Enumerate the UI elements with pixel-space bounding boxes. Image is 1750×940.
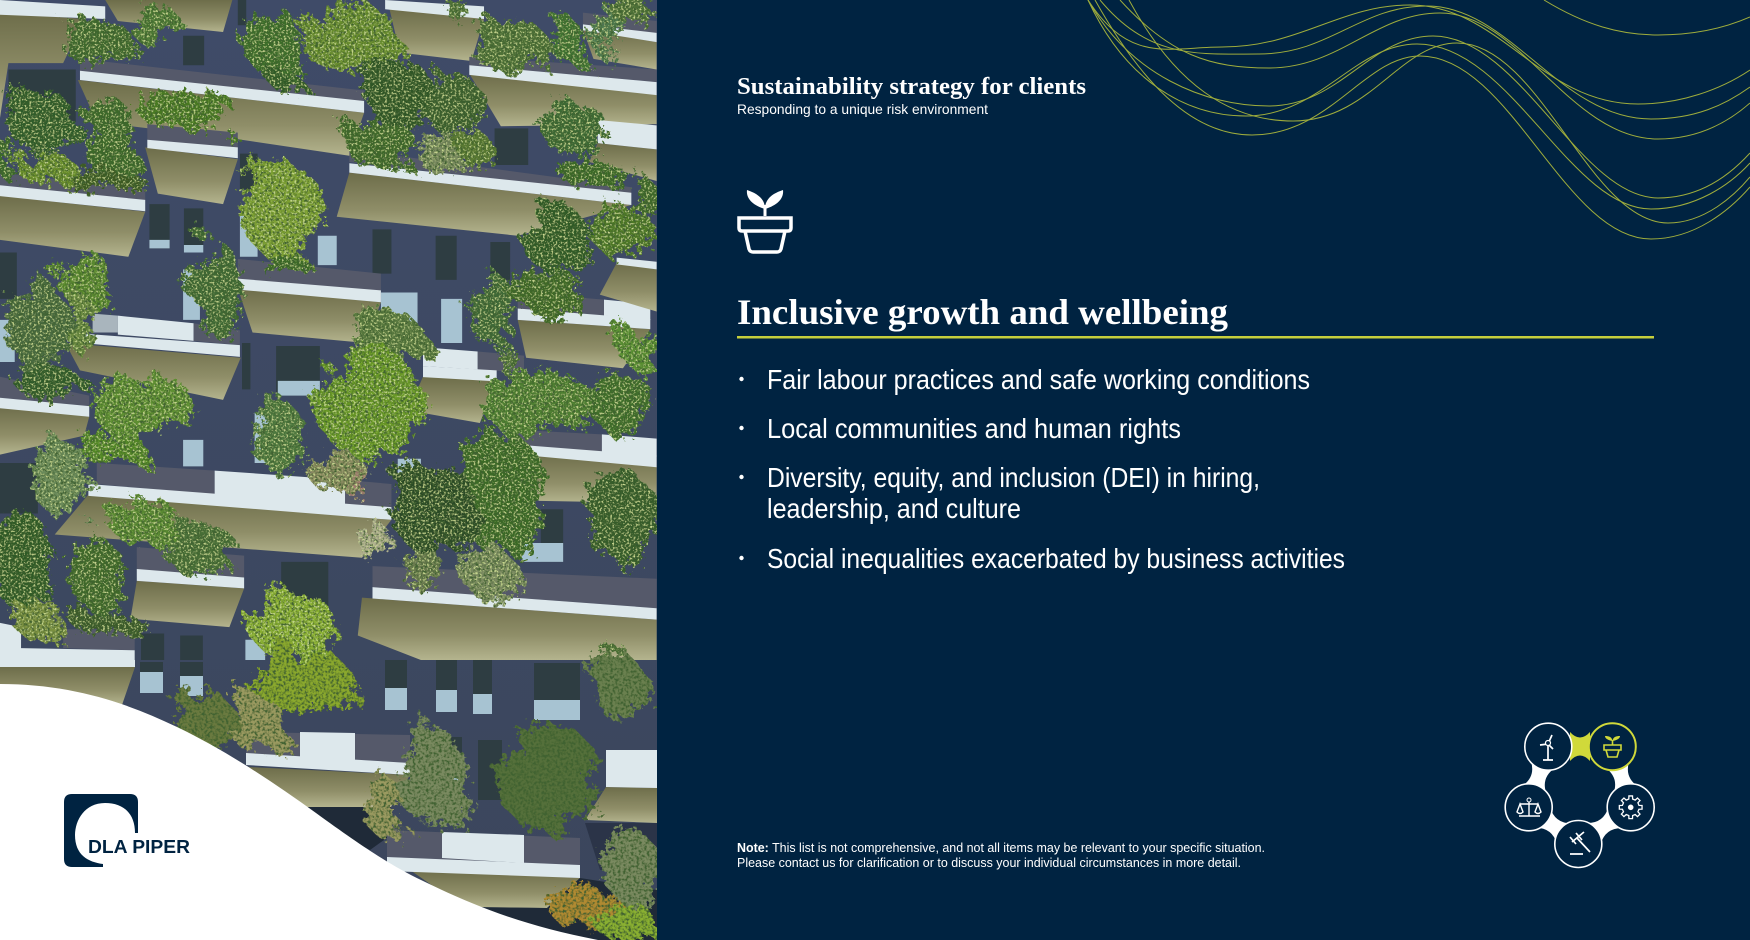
subtitle: Responding to a unique risk environment (737, 101, 988, 117)
navigation ring (1505, 723, 1654, 868)
lower foliage (175, 651, 661, 940)
bullet list: leadership, and culture (767, 493, 1021, 524)
note: Note: This list is not comprehensive, and not all items may be relevant to your specific situation. (737, 840, 1265, 855)
note (737, 840, 1265, 870)
node: scales (1505, 784, 1552, 831)
heading: Inclusive growth and wellbeing (737, 292, 1228, 332)
decorative wave lines (1088, 0, 1750, 239)
balconies (0, 0, 657, 660)
white curved logo panel (0, 684, 598, 940)
logo: DLA Piper: DLA PIPER (88, 837, 190, 857)
bullet list: Diversity, equity, and inclusion (DEI) in hiring, (767, 462, 1260, 493)
node: wind (1525, 723, 1572, 770)
icon: plant pot (739, 190, 791, 252)
bullet list: Local communities and human rights (767, 413, 1181, 444)
foliage (0, 0, 661, 663)
note: Please contact us for clarification or to discuss your individual circumstances in more detail. (737, 855, 1241, 870)
bullet list: Fair labour practices and safe working conditions (767, 364, 1310, 395)
eyebrow title: Sustainability strategy for clients (737, 74, 1086, 100)
node: plant pot active (1589, 723, 1636, 770)
logo: DLA Piper (64, 794, 190, 867)
node: gear (1607, 784, 1654, 831)
lower balconies (0, 660, 657, 940)
node: gavel (1555, 820, 1602, 868)
heading rule (737, 336, 1654, 338)
photo: building with green balconies (0, 0, 661, 940)
bullet list: Social inequalities exacerbated by business activities (767, 543, 1345, 574)
bullet list (739, 364, 1345, 574)
